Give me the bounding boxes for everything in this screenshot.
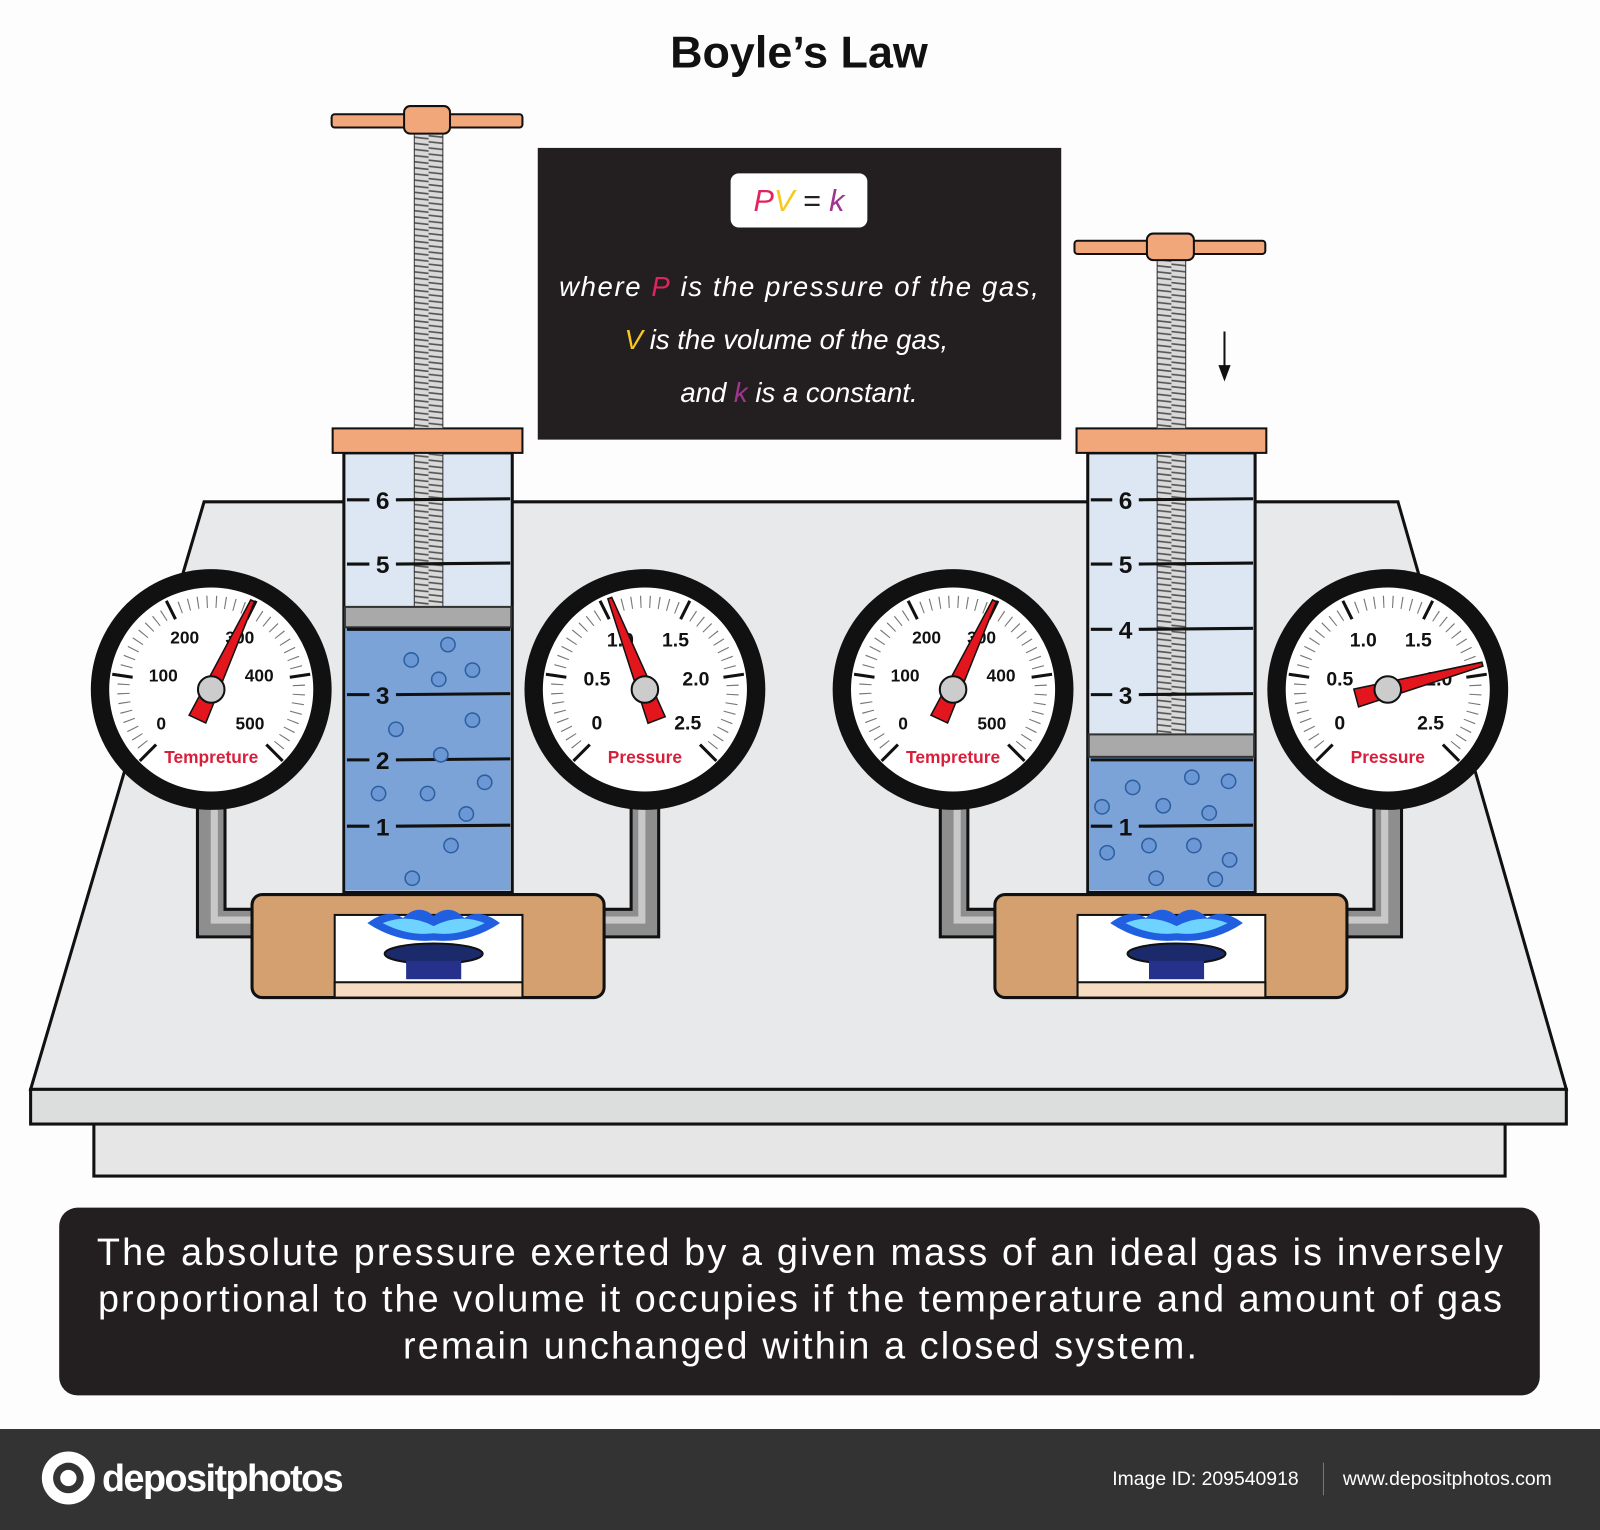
apparatus right <box>829 234 1512 998</box>
explanation text: is the volume of the gas, <box>650 324 948 355</box>
gauge: temperature right: 100 <box>891 665 920 685</box>
gauge: temperature left: 200 <box>170 628 199 648</box>
gauge: temperature left: 400 <box>245 665 274 685</box>
cylinder compressed: 4 <box>1119 618 1133 645</box>
gauge: temperature right: 0 <box>898 713 908 733</box>
gauge: pressure right: 2.5 <box>1417 712 1444 734</box>
cylinder compressed: 6 <box>1119 488 1132 515</box>
base box with burner <box>252 895 604 998</box>
gauge: pressure right <box>1264 565 1512 814</box>
gauge: temperature right <box>829 565 1077 814</box>
gauge: pressure right: 2.0 <box>1425 668 1452 690</box>
gauge: temperature left: 0 <box>156 713 166 733</box>
gauge: temperature left: 500 <box>236 713 264 733</box>
footer: depositphotos <box>102 1457 343 1499</box>
formula panel <box>538 148 1061 440</box>
formula box <box>731 173 867 227</box>
definition box: remain unchanged within a closed system. <box>403 1325 1197 1367</box>
explanation text <box>559 271 1039 408</box>
gauge: pressure right: Pressure <box>1351 747 1425 767</box>
gauge: temperature right: 200 <box>912 628 941 648</box>
gauge: temperature right: 300 <box>967 628 996 648</box>
cylinder <box>332 106 522 892</box>
gauge: temperature left: 300 <box>225 628 254 648</box>
definition box <box>59 1208 1540 1395</box>
formula box: PV = k <box>753 184 846 218</box>
gauge: pressure left: 1.0 <box>607 630 634 652</box>
formula panel: V <box>624 324 645 355</box>
gauge: pressure right: 0 <box>1334 712 1345 734</box>
cylinder: 5 <box>376 552 389 579</box>
gauge: pressure left: 2.0 <box>682 668 709 690</box>
gauge: pressure right: 1.5 <box>1405 630 1432 652</box>
cylinder: 3 <box>376 683 389 710</box>
gauge: pressure left: 2.5 <box>674 712 701 734</box>
cylinder: 1 <box>376 814 389 841</box>
arrow: down <box>1218 332 1231 381</box>
gauge: pressure left: 0.5 <box>583 668 611 690</box>
cylinder compressed <box>1074 234 1266 892</box>
definition box: proportional to the volume it occupies if the temperature and amount of gas <box>98 1278 1502 1320</box>
gauge: temperature right: 400 <box>987 665 1015 685</box>
definition box: The absolute pressure exerted by a given mass of an ideal gas is inversely <box>97 1231 1503 1273</box>
base box with burner <box>995 895 1347 998</box>
gauge: pressure left: Pressure <box>608 747 682 767</box>
gauge: pressure right: 0.5 <box>1326 668 1353 690</box>
title: Boyle’s Law <box>670 26 928 77</box>
gauge: temperature left: 100 <box>149 665 178 685</box>
footer: Image ID: 209540918 <box>1112 1468 1299 1490</box>
cylinder: 2 <box>376 748 389 775</box>
gauge: temperature left: Tempreture <box>164 747 259 767</box>
gauge: pressure left: 0 <box>592 712 602 734</box>
cylinder compressed: 5 <box>1119 552 1132 579</box>
gauge: temperature left <box>87 565 335 814</box>
gauge: pressure right: 1.0 <box>1350 630 1377 652</box>
gauge: pressure left <box>521 565 769 814</box>
apparatus left <box>87 106 769 998</box>
gauge: temperature right: Tempreture <box>906 747 1000 767</box>
footer: www.depositphotos.com <box>1342 1468 1552 1490</box>
explanation text: where P is the pressure of the gas, <box>559 271 1039 302</box>
pipes <box>211 796 645 923</box>
gauge: pressure left: 1.5 <box>662 630 689 652</box>
table <box>31 502 1566 1176</box>
footer <box>0 1429 1600 1530</box>
cylinder compressed: 1 <box>1119 814 1132 841</box>
explanation text: and k is a constant. <box>680 377 918 408</box>
gauge: temperature right: 500 <box>977 713 1006 733</box>
cylinder compressed: 3 <box>1119 683 1132 710</box>
cylinder: 6 <box>376 488 389 515</box>
